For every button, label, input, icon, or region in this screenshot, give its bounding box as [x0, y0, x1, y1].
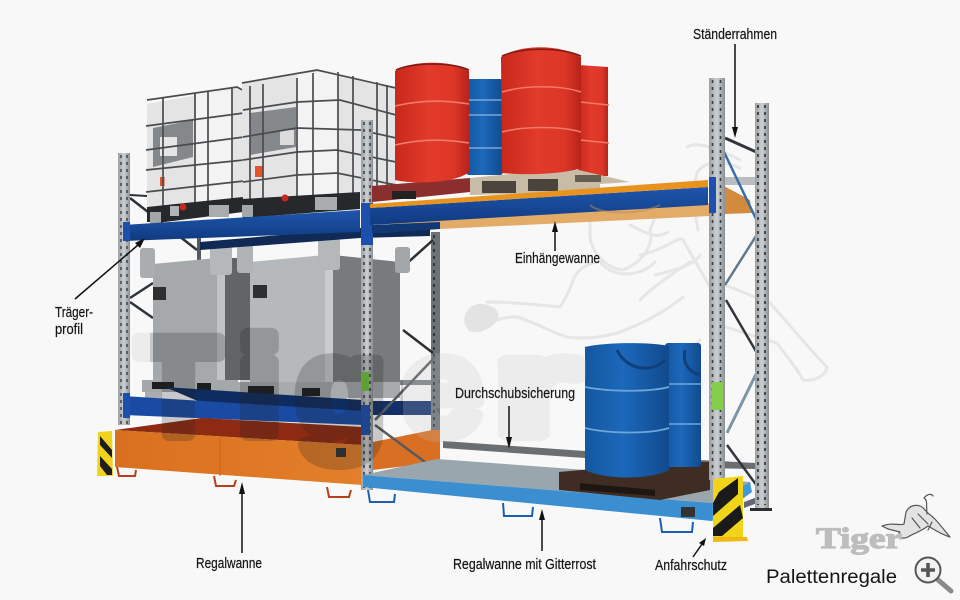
centre frame lower bracing: [375, 357, 435, 462]
drum: red far right: [578, 65, 609, 177]
callout: Trägerprofil: profil: [55, 322, 83, 338]
IBC container: left: [146, 87, 246, 224]
pallet: light: [470, 168, 630, 195]
IBC container: right: [242, 70, 396, 218]
callout: Regalwanne: Regalwanne: [196, 556, 262, 572]
callout: Einhängewanne: Einhängewanne: [515, 251, 600, 267]
callout: Anfahrschutz: [655, 538, 727, 574]
watermark: large Tiger lettering: g: [296, 311, 386, 464]
watermark: large Tiger lettering: e: [402, 311, 482, 464]
Regalwanne mit Gitterrost: blue tub with grating: [363, 459, 752, 532]
blue drums on wooden pallet: lower shelf: [559, 343, 710, 500]
steel tote container: left: [140, 245, 250, 405]
rack frame: left upright with bracing: [118, 153, 201, 425]
callout: Regalwanne mit Gitterrost: Regalwanne mit Gitterrost: [453, 557, 596, 573]
upper beam: left bay: [123, 210, 430, 250]
rack frame: centre front upright: [361, 120, 373, 490]
callout: Durchschubsicherung: [455, 386, 575, 449]
watermark: large Tiger lettering: [137, 311, 578, 464]
Regalwanne: orange spill tub: [115, 418, 440, 497]
rack frame: centre rear upright with bracing: [373, 232, 440, 447]
Durchschubsicherung: back bar: [443, 441, 755, 469]
pallet: dark wood: [559, 462, 710, 500]
drum: blue front: [585, 343, 700, 478]
callout: Trägerprofil: [55, 238, 145, 338]
drum: blue rear: [466, 79, 503, 175]
logo: small tiger icon: [882, 494, 950, 538]
watermark: large Tiger lettering: T: [137, 311, 220, 464]
callout: Regalwanne mit Gitterrost: [453, 509, 596, 573]
callout: Einhängewanne: [515, 221, 600, 267]
red drums on pallets: upper shelf: [372, 47, 630, 202]
drum: blue rear: [665, 343, 701, 467]
caption: Palettenregale: Palettenregale: [766, 567, 897, 588]
callout: Durchschubsicherung: Durchschubsicherung: [455, 386, 575, 402]
callout: Ständerrahmen: Ständerrahmen: [693, 27, 777, 43]
watermark: large Tiger lettering: r: [494, 311, 578, 464]
callout: Trägerprofil: Träger-: [55, 305, 93, 321]
drum: red left: [395, 63, 469, 182]
callout: Anfahrschutz: Anfahrschutz: [655, 558, 727, 574]
icon: magnifier zoom: [916, 558, 951, 591]
steel tote container: right: [237, 238, 410, 409]
bumper guard: left: [97, 431, 113, 476]
logo: small Tiger wordmark: Tiger: [816, 522, 902, 555]
pallet: red: [372, 178, 470, 202]
drum: red centre: [501, 47, 581, 174]
watermark: large tiger outline: [464, 145, 827, 380]
Anfahrschutz: yellow black bumper guard: [713, 476, 748, 542]
rack frame: right front upright: [709, 78, 725, 480]
watermark: large Tiger lettering: i: [237, 311, 282, 464]
callout: Ständerrahmen: [693, 27, 777, 138]
Einhängewanne: orange hanging tray with blue beam: [370, 180, 752, 233]
lower beam: left bay: [123, 387, 363, 425]
callout: Regalwanne: [196, 482, 262, 572]
rack frame: right rear upright with bracing: [724, 103, 772, 511]
